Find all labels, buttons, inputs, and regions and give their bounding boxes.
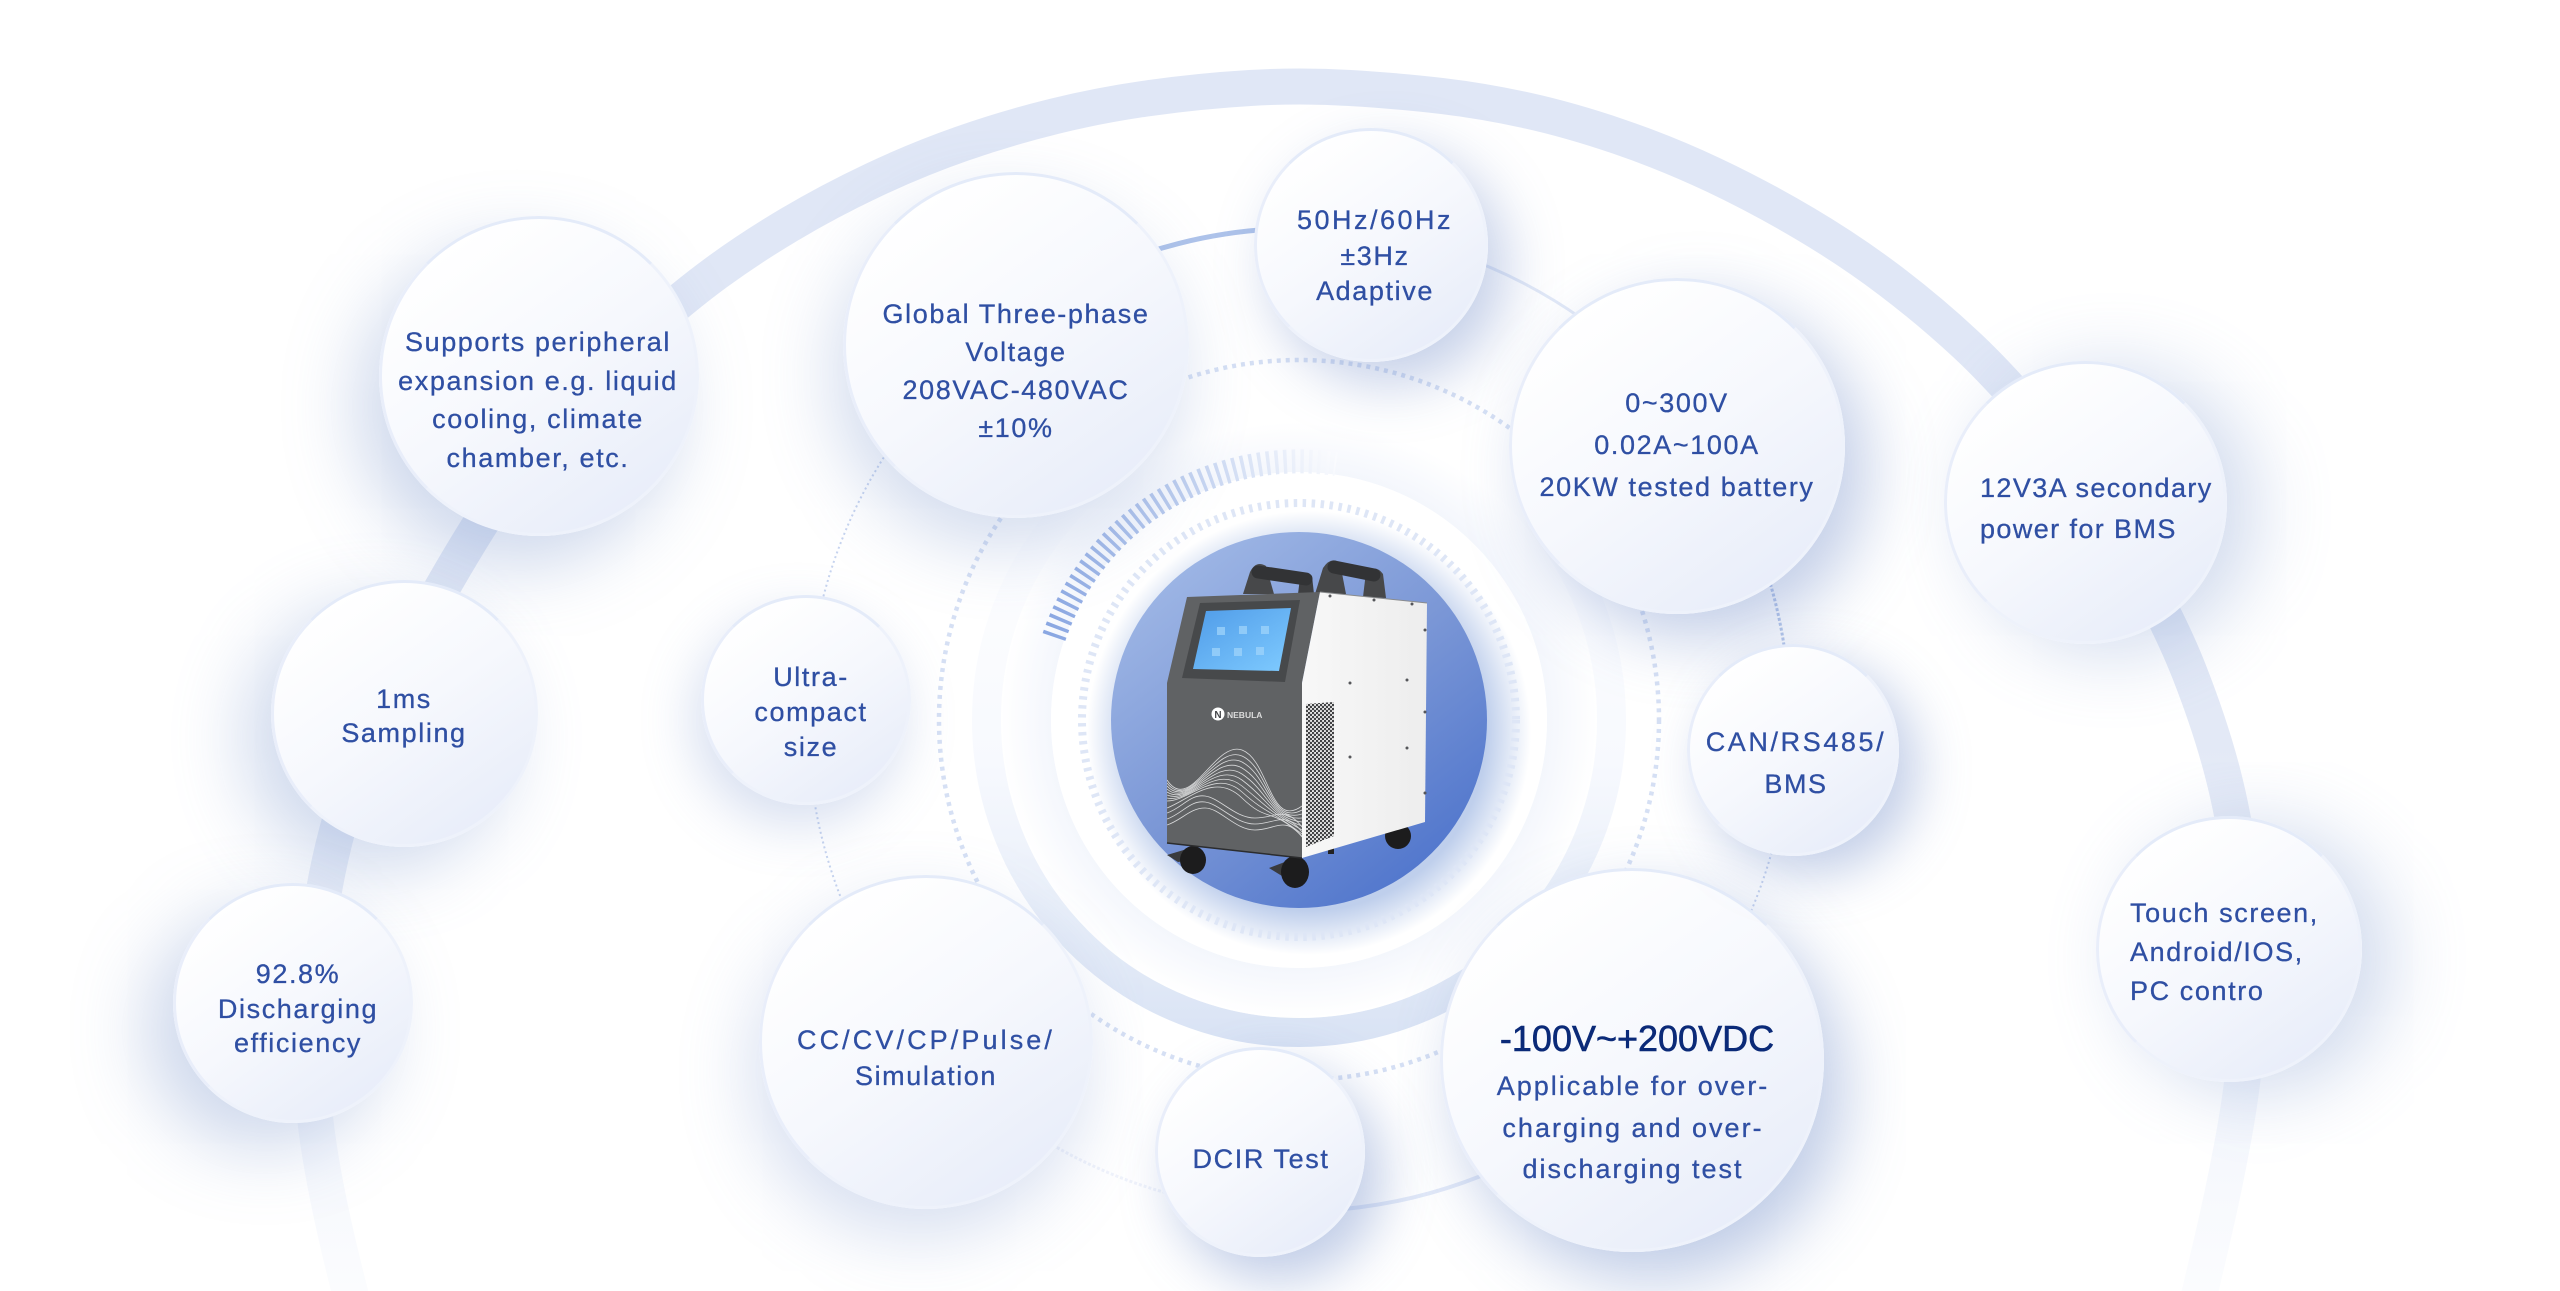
text: global voltage: ±10% xyxy=(978,413,1054,443)
wheels xyxy=(1167,823,1411,888)
text: discharge efficiency: efficiency xyxy=(234,1028,362,1058)
screen bezel xyxy=(1182,600,1300,682)
bubble: touch screen xyxy=(2096,816,2362,1082)
text: tested battery range: 0~300V xyxy=(1625,388,1729,418)
bubble: CAN interfaces xyxy=(1687,644,1899,856)
white halo disc xyxy=(1051,472,1547,968)
partial tick arc xyxy=(1054,461,1336,637)
text: global voltage: 208VAC-480VAC xyxy=(903,375,1129,405)
bubble: secondary power xyxy=(1944,361,2227,644)
text: test modes: CC/CV/CP/Pulse/ xyxy=(797,1025,1055,1055)
wave artwork xyxy=(1167,749,1302,837)
text: touch screen xyxy=(2130,898,2319,1006)
logo badge: NEBULA xyxy=(1227,710,1262,720)
bubble: sampling xyxy=(271,580,538,847)
text: discharge efficiency: 92.8% xyxy=(256,959,340,989)
text: discharge efficiency xyxy=(218,959,378,1058)
outer arc band xyxy=(311,86,2249,1291)
text: frequency: Adaptive xyxy=(1316,276,1434,306)
text: over-charging test xyxy=(1496,1071,1769,1184)
bubble: test modes xyxy=(759,875,1093,1209)
text: compact size: size xyxy=(784,732,838,762)
text: global voltage: Voltage xyxy=(965,337,1067,367)
text: tested battery range xyxy=(1539,388,1815,502)
text: peripheral expansion: chamber, etc. xyxy=(447,443,629,473)
text: frequency: ±3Hz xyxy=(1340,240,1410,270)
screws xyxy=(1328,594,1426,794)
device front bottom edge xyxy=(1167,843,1302,858)
text: peripheral expansion: Supports peripheral xyxy=(405,327,671,357)
side panel top edge xyxy=(1320,592,1427,603)
text: test modes xyxy=(797,1025,1055,1091)
text: discharge efficiency: Discharging xyxy=(218,994,378,1024)
dotted ring xyxy=(939,360,1659,1080)
text: CAN interfaces: BMS xyxy=(1764,769,1828,799)
logo badge xyxy=(1212,708,1262,721)
icon: handles xyxy=(1243,560,1386,598)
text: CAN interfaces: CAN/RS485/ xyxy=(1706,727,1886,757)
text: sampling xyxy=(341,684,467,748)
inner tick ring xyxy=(1082,503,1516,937)
vent grille xyxy=(1306,702,1334,847)
logo badge: N xyxy=(1214,710,1222,721)
text: peripheral expansion xyxy=(398,327,678,473)
text: secondary power: power for BMS xyxy=(1980,514,2177,544)
text: over-charging test: Applicable for over- xyxy=(1497,1071,1769,1101)
bubble: discharge efficiency xyxy=(173,883,413,1123)
bubble: peripheral expansion xyxy=(379,216,699,536)
text: CAN interfaces xyxy=(1706,727,1886,799)
text: touch screen: PC contro xyxy=(2130,976,2264,1006)
thick fading ring band xyxy=(986,408,1612,1032)
heading: voltage range: -100V~+200VDC xyxy=(1500,1018,1774,1059)
device white side panel xyxy=(1302,592,1427,858)
text: test modes: Simulation xyxy=(855,1061,997,1091)
text: tested battery range: 20KW tested battery xyxy=(1539,472,1815,502)
text: compact size xyxy=(754,662,868,762)
text: frequency xyxy=(1297,205,1453,306)
text: global voltage xyxy=(883,299,1149,443)
product: battery tester xyxy=(1167,560,1427,888)
bubble: DCIR test xyxy=(1155,1047,1365,1257)
bubble: tested battery range xyxy=(1509,278,1845,614)
text: tested battery range: 0.02A~100A xyxy=(1594,430,1760,460)
background rings and central device xyxy=(298,68,2260,1210)
bubble: frequency xyxy=(1254,128,1488,362)
touch screen xyxy=(1193,608,1291,671)
bubble: global voltage xyxy=(843,172,1189,518)
text: compact size: compact xyxy=(754,697,868,727)
device disc glow xyxy=(1087,511,1531,955)
text: secondary power: 12V3A secondary xyxy=(1980,473,2213,503)
outer ring segments xyxy=(808,228,1790,1211)
text: peripheral expansion: cooling, climate xyxy=(432,404,644,434)
text: secondary power xyxy=(1980,473,2213,544)
blue device disc xyxy=(1111,532,1487,908)
text: over-charging test: charging and over- xyxy=(1502,1112,1764,1142)
text: over-charging test: discharging test xyxy=(1522,1154,1744,1184)
text: sampling: Sampling xyxy=(341,718,467,748)
soft inner ring xyxy=(1026,447,1572,993)
text: frequency: 50Hz/60Hz xyxy=(1297,205,1453,235)
text: sampling: 1ms xyxy=(376,684,432,714)
text: peripheral expansion: expansion e.g. liquid xyxy=(398,366,678,396)
bubble: compact size xyxy=(701,595,911,805)
text: touch screen: Touch screen, xyxy=(2130,898,2319,928)
device front panel xyxy=(1167,592,1320,858)
screen icons xyxy=(1212,626,1269,656)
text: global voltage: Global Three-phase xyxy=(883,299,1149,329)
text: DCIR test: DCIR Test xyxy=(1193,1144,1329,1174)
bubble: voltage range xyxy=(1440,868,1824,1252)
text: compact size: Ultra- xyxy=(773,662,849,692)
text: touch screen: Android/IOS, xyxy=(2130,937,2304,967)
